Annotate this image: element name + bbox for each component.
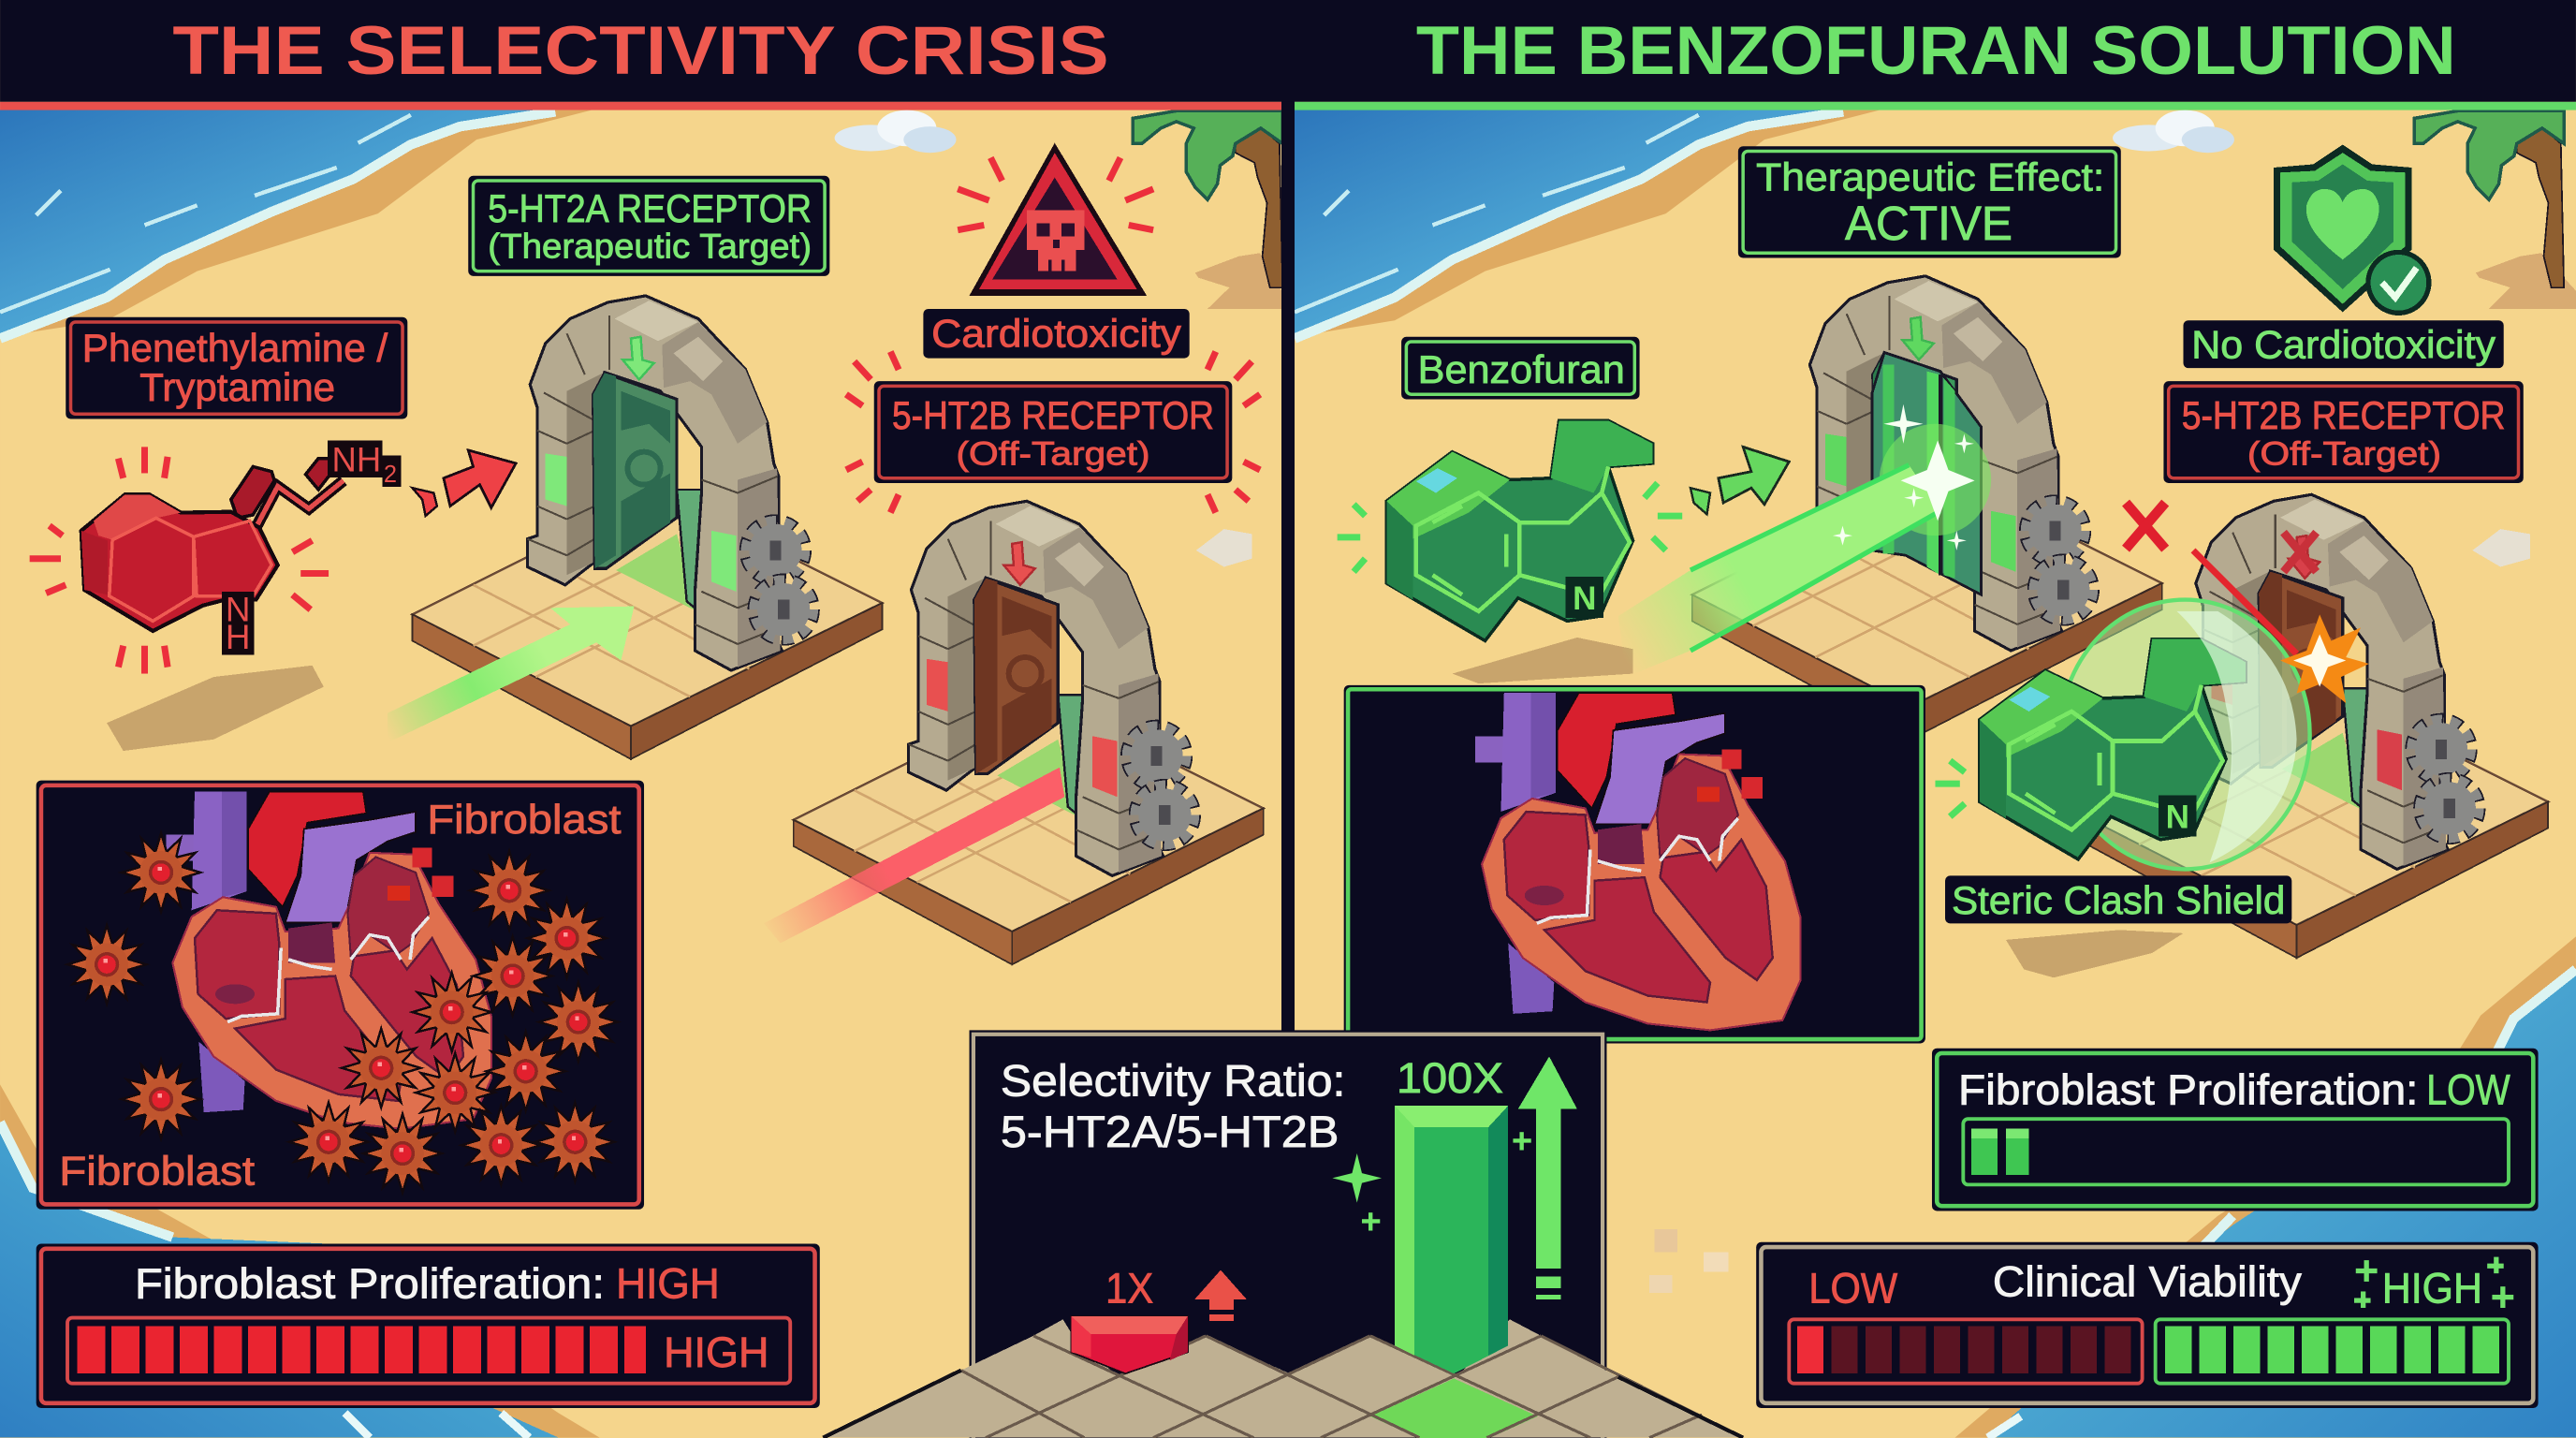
palm tree right (2414, 110, 2564, 287)
molecule: benzofuran in shield (1980, 639, 2246, 859)
panel: fibroblast proliferation high: Fibroblast Proliferation: (135, 1259, 605, 1307)
red deflected beam and explosion (2193, 550, 2369, 703)
molecule: phenethylamine / tryptamine (81, 440, 401, 656)
panel: fibroblast proliferation high: HIGH (664, 1328, 768, 1376)
title: benzofuran solution: THE BENZOFURAN SOLUTION (1416, 11, 2456, 89)
label: benzofuran: Benzofuran (1418, 347, 1625, 391)
center divider (1281, 0, 1295, 1043)
panel: clinical viability: LOW (1808, 1265, 1897, 1313)
clouds (835, 110, 2234, 153)
rays around benzofuran (1338, 483, 1682, 572)
label: fibroblast top: Fibroblast (427, 797, 621, 843)
icon: shield with heart and check (2274, 144, 2431, 315)
label: 5-HT2B receptor, crisis side: (Off-Target) (956, 436, 1150, 473)
molecule: phenethylamine / tryptamine: NH (332, 440, 381, 478)
gate: therapeutic 5-HT2A (solution) (1692, 276, 2162, 740)
label: therapeutic effect active: ACTIVE (1845, 197, 2012, 250)
panel: clinical viability: HIGH (2382, 1265, 2482, 1313)
steric clash shield bubble (2060, 600, 2310, 869)
arrow: green beam to 5-HT2A (388, 607, 634, 742)
shield highlight crescent (2176, 611, 2297, 862)
heart illustration, healthy (1475, 693, 1801, 1030)
label: 5-HT2B receptor, crisis side: 5-HT2B RECEPTOR (892, 393, 1214, 437)
panel: fibroblast proliferation high (37, 1244, 820, 1408)
molecule: phenethylamine / tryptamine: H (226, 618, 250, 656)
icon: red X blocked (2126, 503, 2165, 549)
sea: right bottom (1988, 969, 2576, 1438)
panel: fibroblast proliferation low: LOW (2426, 1065, 2510, 1113)
label: phenethylamine / tryptamine: Phenethylamine / (82, 326, 388, 370)
label: 5-HT2A receptor: 5-HT2A RECEPTOR (488, 186, 812, 230)
beach shadows and rocks (107, 253, 2576, 1293)
rays around warning triangle (958, 157, 1153, 230)
icon: small X on gate (2284, 533, 2317, 572)
icon: tall green arrow (1518, 1056, 1577, 1299)
icon: sparkle on gate (1833, 404, 1975, 550)
molecule: phenethylamine / tryptamine: N (226, 590, 250, 628)
bar: 1X red (1071, 1316, 1188, 1373)
red meter segments (78, 1326, 646, 1373)
label: phenethylamine / tryptamine: Tryptamine (139, 365, 335, 409)
arrow: benzofuran to gate (1690, 447, 1789, 514)
icon: warning triangle with skull (970, 143, 1147, 296)
arrow: red molecule to gate (413, 450, 516, 516)
panel: clinical viability: Clinical Viability (1993, 1258, 2302, 1306)
sparkles around high (2354, 1257, 2513, 1308)
sea: right top (1295, 110, 1843, 339)
panel: healthy heart (1344, 685, 1925, 1043)
panel: clinical viability (1756, 1242, 2539, 1408)
label: steric clash shield: Steric Clash Shield (1952, 878, 2285, 922)
label: phenethylamine / tryptamine (66, 317, 407, 419)
label: 5-HT2B receptor, crisis side (874, 381, 1232, 483)
label: 5-HT2B receptor, solution side: 5-HT2B RECEPTOR (2182, 393, 2505, 437)
panel: fibroblast proliferation low (1932, 1049, 2539, 1211)
green meter segments (1971, 1129, 2029, 1175)
label: benzofuran (1401, 337, 1640, 399)
heading: selectivity ratio: Selectivity Ratio: (1001, 1057, 1345, 1107)
value: 100X: 100X (1397, 1054, 1503, 1102)
glowing double door (1872, 353, 1982, 594)
panel: selectivity ratio chart (823, 1030, 1743, 1438)
panel: fibroblast proliferation low: Fibroblast Proliferation: (1958, 1065, 2418, 1113)
molecule: phenethylamine / tryptamine: 2 (384, 462, 397, 488)
label: 5-HT2B receptor, solution side (2163, 381, 2524, 483)
panel: heart with fibroblasts (37, 781, 644, 1210)
icon: small red arrow (1194, 1270, 1247, 1321)
gate: blocked 5-HT2B (solution) (2078, 494, 2548, 958)
gate: 5-HT2A receptor (crisis) (413, 296, 883, 759)
label: 5-HT2A receptor (468, 176, 829, 276)
sea: left top (0, 110, 555, 339)
heart illustration, damaged (166, 791, 491, 1129)
bar: 100X green (1395, 1106, 1508, 1373)
label: therapeutic effect active: Therapeutic Effect: (1756, 155, 2104, 199)
heading: selectivity ratio (1001, 1057, 1345, 1157)
label: fibroblast bottom: Fibroblast (59, 1148, 255, 1194)
low meter segments (1797, 1326, 2131, 1373)
rays around 5-HT2B label (846, 352, 1260, 513)
label: cardiotoxicity: Cardiotoxicity (931, 311, 1181, 355)
label: 5-HT2A receptor: (Therapeutic Target) (488, 227, 812, 266)
title: selectivity crisis: THE SELECTIVITY CRISIS (172, 11, 1109, 89)
fibroblast cells (67, 833, 618, 1193)
molecule: benzofuran (1386, 420, 1653, 640)
label: no cardiotoxicity: No Cardiotoxicity (2191, 323, 2496, 367)
arrow: red beam to 5-HT2B (764, 768, 1064, 943)
value: 1X: 1X (1105, 1265, 1153, 1313)
rays around red molecule (30, 447, 329, 674)
arrow: green binding beam (1618, 424, 1991, 677)
title bar (0, 0, 2576, 110)
sea: left bottom (0, 1123, 559, 1438)
label: therapeutic effect active (1738, 146, 2121, 258)
rays around shielded molecule (1935, 761, 1965, 816)
heading: selectivity ratio: 5-HT2A/5-HT2B (1001, 1108, 1339, 1157)
label: 5-HT2B receptor, solution side: (Off-Target) (2247, 436, 2441, 473)
tile floor (823, 1319, 1743, 1438)
palm tree left (1133, 110, 1282, 287)
high meter segments (2165, 1326, 2499, 1373)
panel: fibroblast proliferation high: HIGH (616, 1259, 720, 1307)
gate: 5-HT2B receptor (crisis) (794, 501, 1264, 964)
sparkles near bar (1332, 1132, 1531, 1231)
